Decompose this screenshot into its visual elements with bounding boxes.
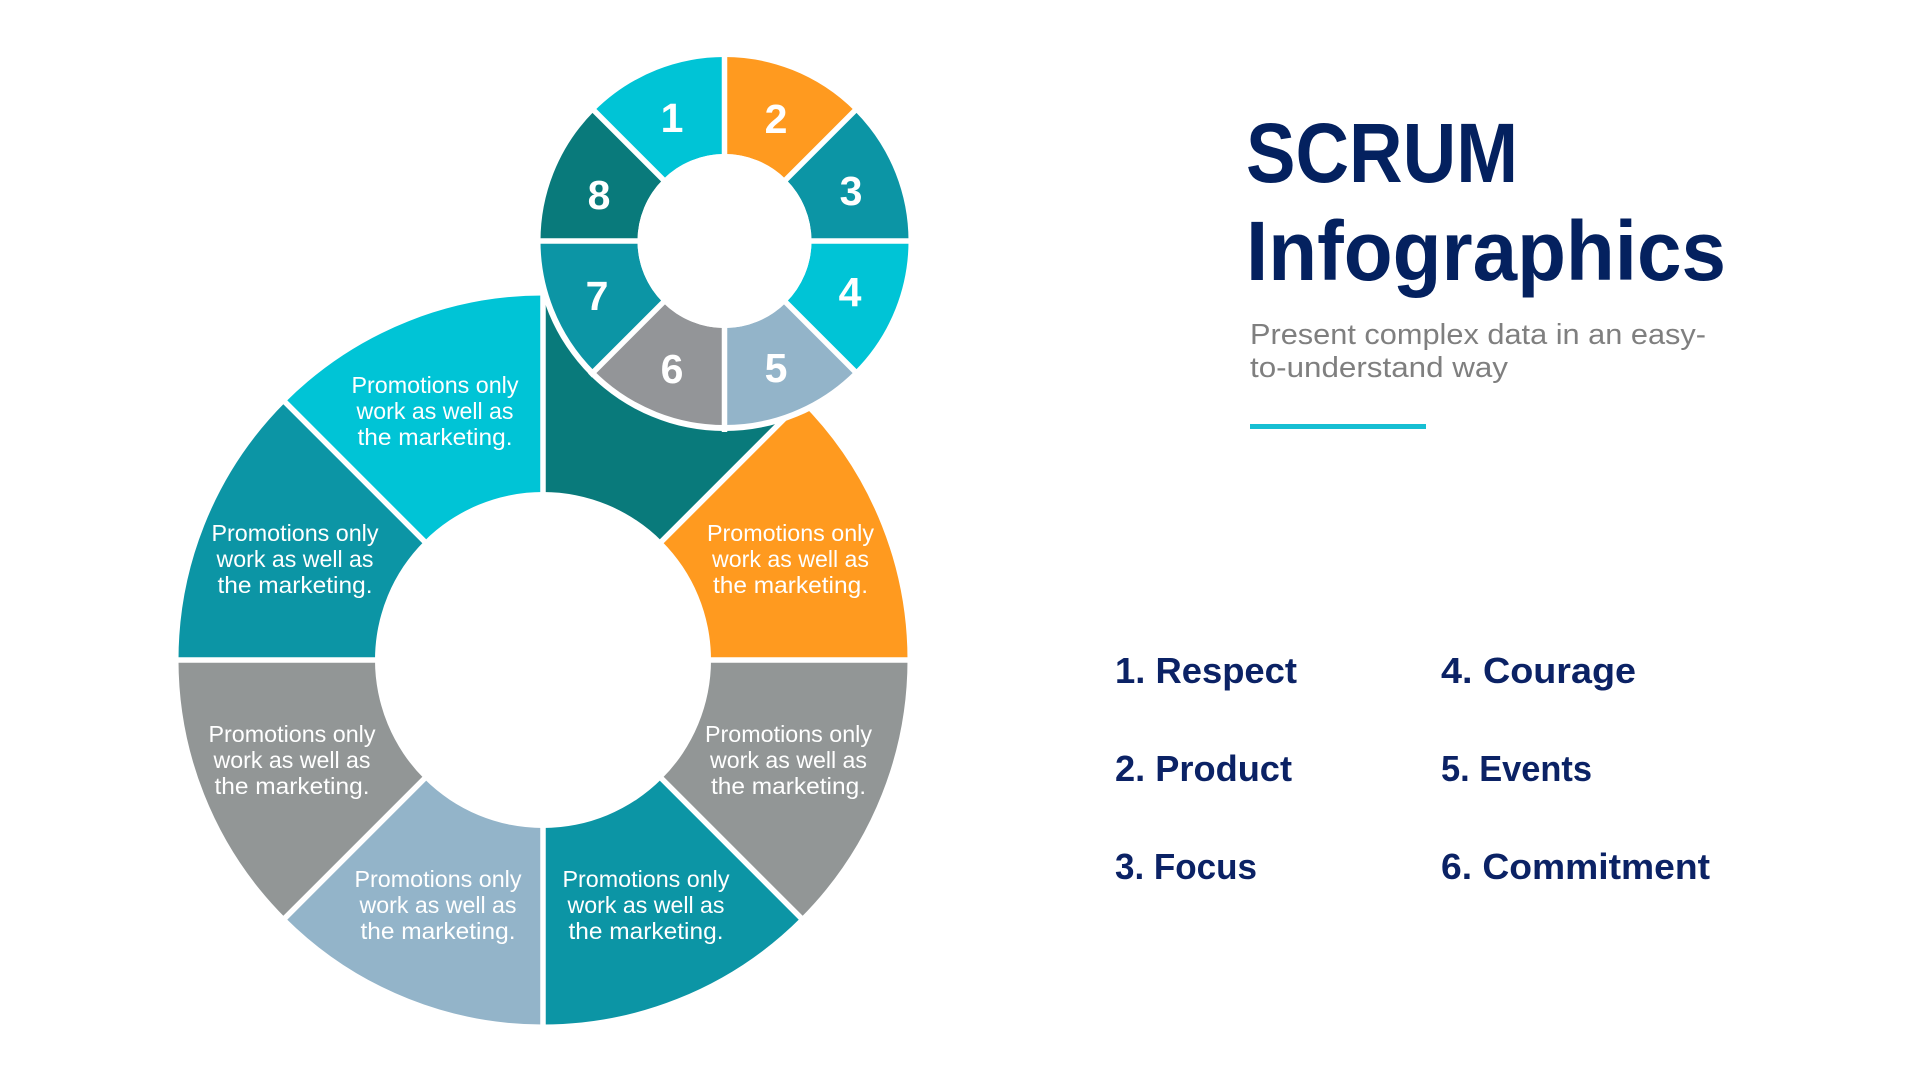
segment: grey left: Promotions only: [208, 721, 376, 747]
segment: teal bottom: Promotions only: [562, 866, 730, 892]
segment: teal left: the marketing.: [218, 572, 372, 598]
segment: cyan: the marketing.: [358, 424, 512, 450]
segment: cyan: Promotions only: [352, 372, 519, 398]
small numbered ring: [534, 50, 915, 432]
segment: light blue: work as well as: [358, 892, 516, 918]
wedge 4: [786, 241, 909, 372]
item 4: 4. Courage: [1441, 650, 1636, 691]
segment: teal bottom: work as well as: [566, 892, 724, 918]
values list: [1115, 650, 1710, 887]
segment: orange: work as well as: [711, 546, 869, 572]
segment: cyan: [285, 295, 543, 541]
segment: grey right: Promotions only: [705, 721, 872, 747]
accent bar: [1250, 424, 1426, 429]
large ring diagram: [173, 290, 913, 1030]
wedge 2: 2: [765, 96, 787, 142]
wedge 7: [540, 241, 663, 372]
wedge 5: 5: [765, 345, 787, 391]
item 5: 5. Events: [1441, 748, 1592, 789]
wedge 6: [594, 302, 724, 426]
segment: teal left: Promotions only: [212, 520, 379, 546]
segment: grey right: work as well as: [709, 747, 867, 773]
segment: light blue: Promotions only: [354, 866, 522, 892]
segment: teal bottom: the marketing.: [568, 918, 724, 944]
item 2: 2. Product: [1115, 748, 1292, 789]
segment: grey left: work as well as: [212, 747, 370, 773]
wedge 6: 6: [661, 346, 683, 392]
item 1: 1. Respect: [1115, 650, 1297, 691]
segment: teal left: work as well as: [215, 546, 374, 572]
segment: grey left: [178, 660, 424, 918]
segment: cyan: work as well as: [355, 398, 514, 424]
segment: teal bottom: [543, 779, 801, 1025]
wedge 1: 1: [661, 95, 683, 141]
subtitle: Present complex data in an easy-: [1250, 319, 1706, 351]
wedge 1: [594, 56, 724, 180]
title: [1246, 106, 1726, 298]
segment: light blue: the marketing.: [360, 918, 516, 944]
segment: grey right: [662, 660, 908, 918]
title: Infographics: [1246, 204, 1726, 298]
subtitle: [1250, 319, 1706, 384]
segment: dark teal: [543, 295, 801, 541]
item 3: 3. Focus: [1115, 846, 1257, 887]
wedge 8: 8: [588, 172, 610, 218]
title: SCRUM: [1246, 106, 1518, 200]
wedge 3: 3: [840, 168, 862, 214]
segment: orange: Promotions only: [707, 520, 874, 546]
segment: grey right: the marketing.: [711, 773, 866, 799]
segment: grey left: the marketing.: [214, 773, 370, 799]
segment: light blue: [285, 779, 543, 1025]
wedge 7: 7: [586, 273, 608, 319]
wedge 8: [540, 110, 663, 241]
wedge 5: [724, 302, 855, 426]
subtitle: to-understand way: [1250, 352, 1509, 384]
segment: orange: [662, 402, 908, 660]
wedge 2: [724, 56, 855, 180]
segment: teal left: [178, 402, 424, 660]
wedge 4: 4: [839, 269, 862, 315]
segment: orange: the marketing.: [713, 572, 868, 598]
item 6: 6. Commitment: [1441, 846, 1710, 887]
wedge 3: [786, 110, 909, 241]
